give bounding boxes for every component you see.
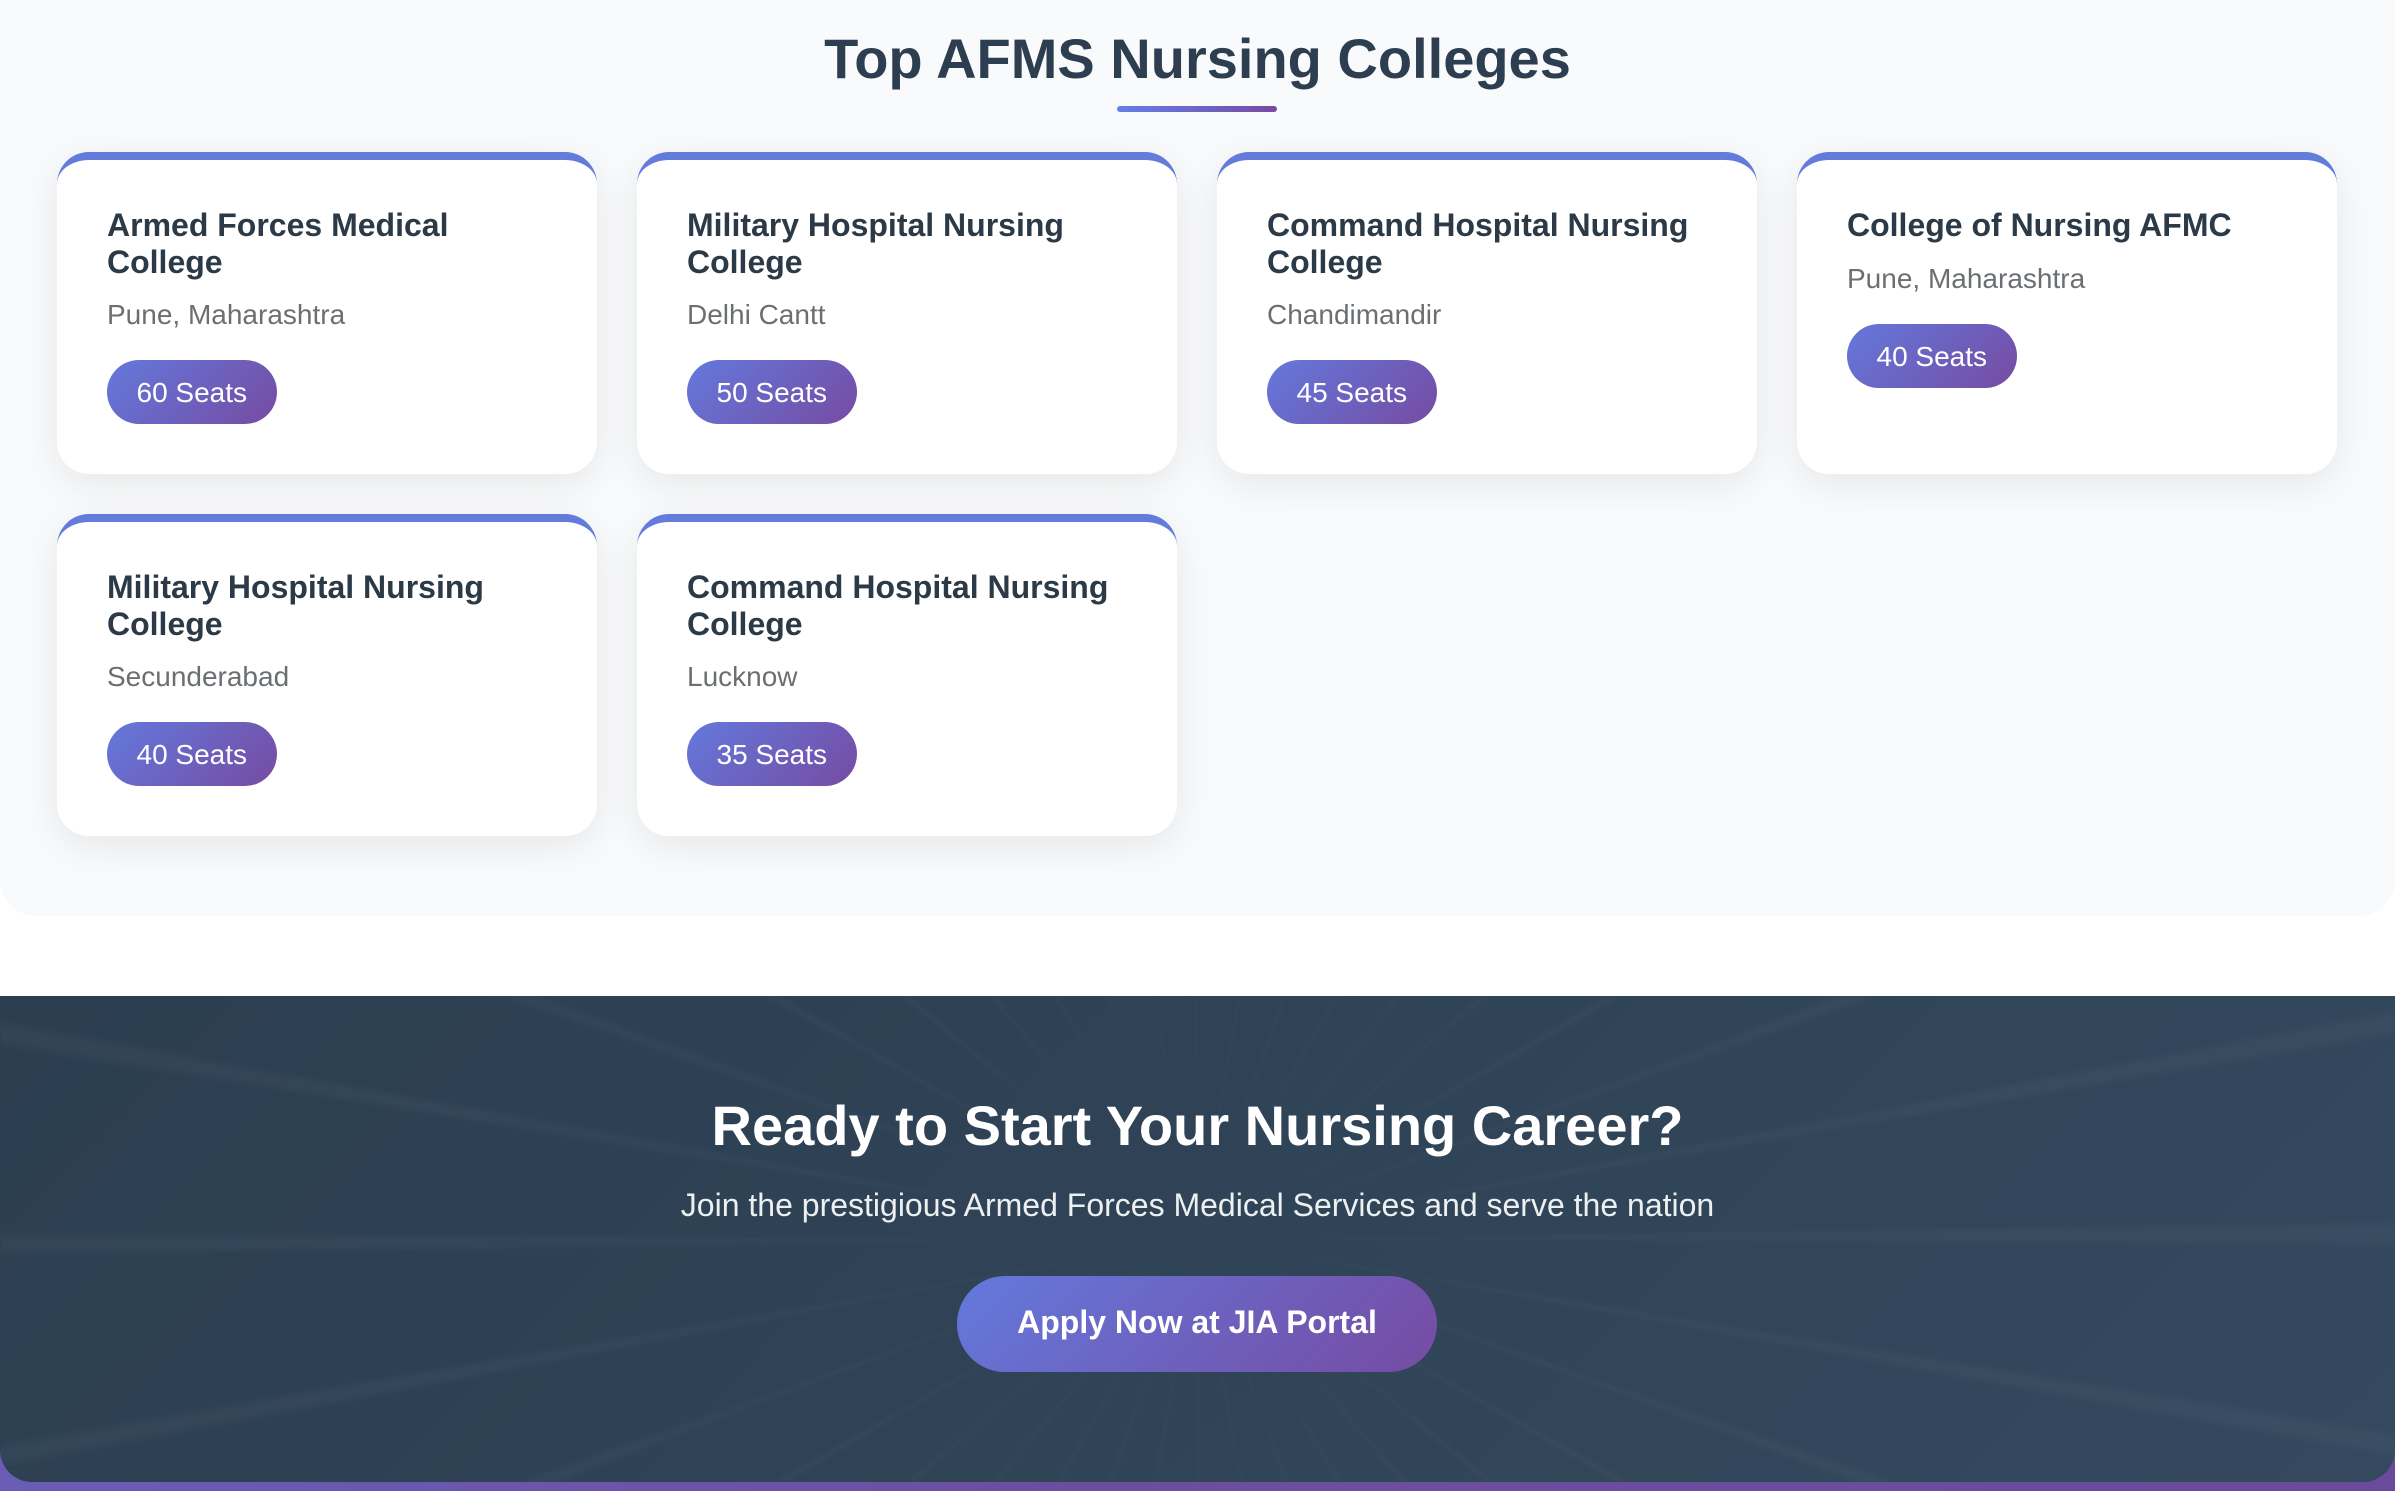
location: Lucknow — [687, 661, 798, 692]
apply button — [957, 1276, 1437, 1372]
call to action heading: Ready to Start Your Nursing Career? — [712, 1094, 1683, 1157]
card: Military Hospital Nursing College, Secunderabad — [57, 514, 597, 836]
panel: call to action — [0, 996, 2395, 1482]
seats badge — [1847, 324, 2017, 388]
card: Military Hospital Nursing College, Delhi Cantt — [637, 152, 1177, 474]
location: Pune, Maharashtra — [107, 299, 345, 330]
seats badge: 35 Seats — [716, 739, 827, 770]
call to action subtext: Join the prestigious Armed Forces Medical Services and serve the nation — [681, 1187, 1714, 1223]
apply button: Apply Now at JIA Portal — [1017, 1304, 1377, 1340]
card: Command Hospital Nursing College, Chandimandir — [1217, 152, 1757, 474]
college name: Command Hospital Nursing College — [1267, 207, 1688, 280]
college name: Armed Forces Medical College — [107, 207, 448, 280]
seats badge: 60 Seats — [136, 377, 247, 408]
location: Pune, Maharashtra — [1847, 263, 2085, 294]
college name: Military Hospital Nursing College — [107, 569, 484, 642]
seats badge — [107, 360, 277, 424]
college name: Command Hospital Nursing College — [687, 569, 1108, 642]
card: Armed Forces Medical College — [57, 152, 597, 474]
seats badge — [687, 360, 857, 424]
college name: Military Hospital Nursing College — [687, 207, 1064, 280]
panel: top AFMS nursing colleges section — [0, 0, 2395, 916]
card: Command Hospital Nursing College, Lucknow — [637, 514, 1177, 836]
location: Chandimandir — [1267, 299, 1441, 330]
seats badge: 50 Seats — [716, 377, 827, 408]
title: Top AFMS Nursing Colleges — [824, 27, 1571, 90]
bottom purple gradient strip — [0, 1440, 2395, 1491]
title underline — [1117, 106, 1277, 112]
card: College of Nursing AFMC — [1797, 152, 2337, 474]
seats badge — [1267, 360, 1437, 424]
seats badge: 40 Seats — [1876, 341, 1987, 372]
seats badge: 45 Seats — [1296, 377, 1407, 408]
seats badge: 40 Seats — [136, 739, 247, 770]
location: Secunderabad — [107, 661, 289, 692]
seats badge — [107, 722, 277, 786]
location: Delhi Cantt — [687, 299, 826, 330]
college name: College of Nursing AFMC — [1847, 207, 2232, 243]
seats badge — [687, 722, 857, 786]
